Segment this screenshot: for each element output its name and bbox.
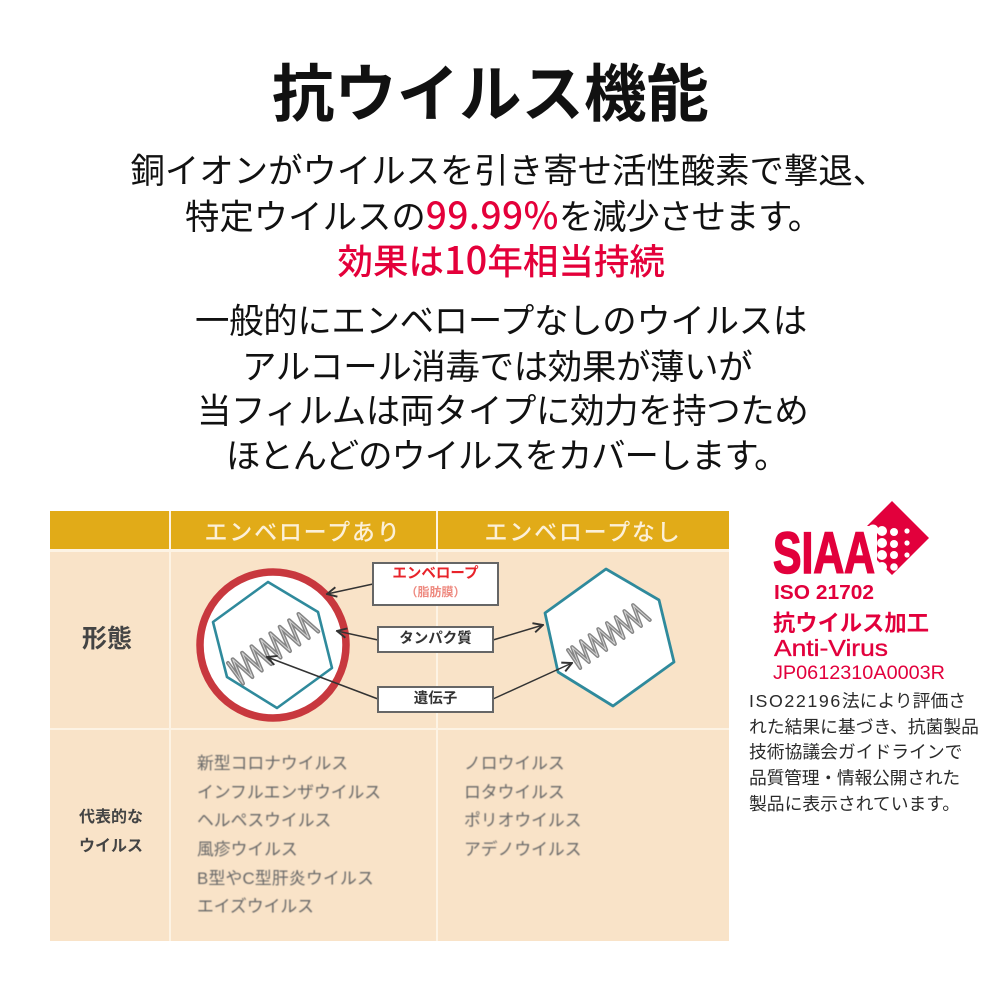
virus list: with envelope: ヘルペスウイルス (197, 811, 331, 830)
icon: non-enveloped virus (545, 569, 674, 706)
icon: genome coil (228, 614, 318, 684)
callout: envelope: エンベロープ (392, 566, 479, 582)
logo: SIAA mark (773, 501, 945, 684)
virus list: without envelope (464, 754, 581, 859)
callout: envelope (372, 562, 499, 606)
logo text: Anti-Virus: Anti-Virus (774, 635, 888, 661)
text block: certification note: 製品に表示されています。 (749, 794, 960, 814)
header: without envelope: エンベロープなし (484, 519, 682, 545)
logo text: registration number: JP0612310A0003R (773, 662, 945, 684)
virus list: with envelope: 風疹ウイルス (197, 840, 298, 859)
virus list: with envelope: 新型コロナウイルス (197, 754, 348, 773)
row label: representative viruses (79, 808, 143, 855)
row label: representative viruses: ウイルス (79, 838, 143, 855)
title: 抗ウイルス機能 (272, 61, 709, 130)
text block: envelope explanation: ほとんどのウイルスをカバーします。 (226, 438, 787, 476)
panel: comparison table (50, 511, 729, 941)
header: with envelope: エンベロープあり (204, 519, 402, 545)
text block: certification note: 技術協議会ガイドラインで (749, 742, 962, 762)
logo text: SIAA: SIAA (773, 521, 875, 586)
virus list: with envelope: インフルエンザウイルス (197, 783, 381, 802)
logo text: ISO 21702: ISO 21702 (774, 582, 874, 604)
text block: certification note: れた結果に基づき、抗菌製品 (749, 717, 979, 737)
virus list: without envelope: ポリオウイルス (464, 811, 581, 830)
text block: certification note: 品質管理・情報公開された (749, 768, 960, 788)
virus list: without envelope: アデノウイルス (464, 840, 581, 859)
text block: certification note (749, 691, 979, 814)
virus list: with envelope: エイズウイルス (197, 897, 314, 916)
text block: copper ion description: 特定ウイルスの99.99%を減少させます。 (185, 186, 821, 240)
logo text: anti-virus processing: 抗ウイルス加工 (773, 611, 929, 636)
callout: protein (377, 626, 494, 653)
icon: genome coil (568, 605, 650, 668)
text block: certification note: ISO22196法により評価さ (749, 691, 966, 711)
row label: form: 形態 (82, 625, 132, 653)
row label: representative viruses: 代表的な (79, 809, 143, 826)
arrows: callouts to virus parts (267, 584, 572, 699)
text block: copper ion description (130, 153, 887, 285)
text block: envelope explanation: 一般的にエンベロープなしのウイルスは (195, 303, 807, 341)
callout: protein: タンパク質 (399, 631, 472, 647)
table header band (50, 511, 729, 549)
callout: gene (377, 686, 494, 713)
virus list: without envelope: ロタウイルス (464, 783, 565, 802)
callout: gene: 遺伝子 (414, 691, 457, 707)
text block: envelope explanation: 当フィルムは両タイプに効力を持つため (197, 393, 808, 431)
icon: enveloped virus (200, 572, 346, 718)
callout: envelope: （脂肪膜） (405, 585, 466, 599)
virus list: with envelope: B型やC型肝炎ウイルス (197, 869, 374, 888)
text block: envelope explanation: アルコール消毒では効果が薄いが (242, 349, 752, 387)
text block: envelope explanation (195, 303, 808, 476)
icon: SIAA diamond (867, 501, 929, 575)
text block: copper ion description: 銅イオンがウイルスを引き寄せ活性酸素で撃退、 (130, 153, 887, 191)
virus list: without envelope: ノロウイルス (464, 754, 565, 773)
highlight: 10-year effect: 効果は10年相当持続 (338, 230, 665, 285)
virus list: with envelope (197, 754, 381, 916)
